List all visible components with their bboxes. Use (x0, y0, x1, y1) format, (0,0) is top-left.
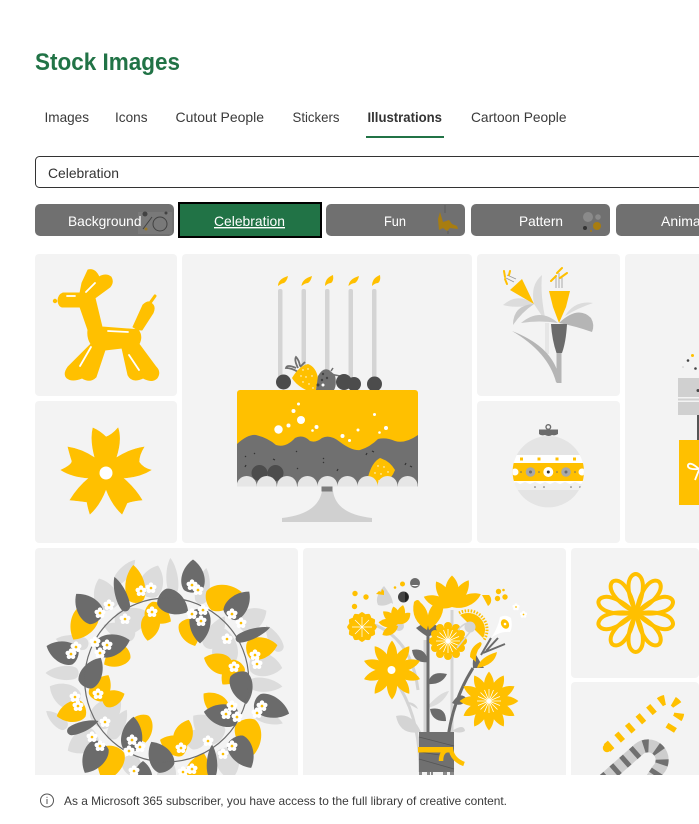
tab: Cutout People: Cutout People (176, 109, 264, 125)
small fan flower (378, 604, 413, 639)
icon: info (40, 794, 54, 807)
tile: flower outline (571, 548, 699, 678)
tile: bouquet (303, 548, 566, 788)
tile: yellow flower (35, 401, 177, 543)
lower fruit (245, 451, 412, 486)
fan flower (422, 576, 483, 612)
gray cane (604, 746, 662, 782)
cake body (237, 390, 418, 486)
large daisy B (362, 641, 422, 699)
tile: lilies (477, 254, 620, 396)
dark stems and leaves (412, 620, 505, 772)
tab: Cartoon People: Cartoon People (471, 109, 567, 125)
chip: Background: Background (68, 213, 142, 229)
active tab underline (366, 136, 444, 138)
candle flames (278, 275, 380, 286)
cake stand (282, 491, 372, 522)
bouquet wrap (418, 732, 464, 775)
chip: Fun: Fun (384, 213, 406, 229)
chip: Pattern: Pattern (519, 213, 563, 229)
wreath ring (85, 598, 249, 762)
tab bar (44, 109, 567, 138)
tile: candy canes (571, 682, 699, 788)
scallop trim (237, 476, 418, 486)
light stems and leaves (375, 587, 465, 772)
light leaves (42, 556, 286, 786)
search box: Celebration (48, 165, 119, 181)
chip: Background (35, 204, 174, 236)
half gear flower H (457, 611, 487, 648)
tab: Stickers: Stickers (292, 109, 340, 125)
fruit on top (276, 357, 382, 392)
chip: Animals (616, 204, 699, 236)
scalloped flower D (429, 622, 467, 660)
tile: birthday cake (182, 254, 472, 543)
tile: gift boxes (625, 254, 699, 543)
seed pods and dots (352, 578, 527, 618)
chip: Celebration (selected) (179, 203, 321, 237)
chip: Celebration (selected): Celebration (214, 213, 285, 229)
blossoms (66, 579, 268, 777)
footer (0, 775, 699, 824)
chip: Fun (326, 204, 465, 236)
white bell flower (491, 616, 512, 638)
large daisy C (460, 672, 518, 730)
tile: ornament (477, 401, 620, 543)
chip: Pattern (471, 204, 610, 236)
daisy flower A (346, 611, 378, 643)
tab: Illustrations (active): Illustrations (368, 109, 442, 125)
tab: Icons: Icons (115, 109, 148, 125)
title: Stock Images (35, 49, 180, 76)
yellow cane (603, 700, 679, 752)
footer note: As a Microsoft 365 subscriber, you have access to the full library of creative content. (64, 794, 507, 808)
tab: Images: Images (44, 109, 89, 125)
sprinkles (274, 402, 388, 442)
tile: balloon dog (35, 254, 177, 396)
candles (278, 289, 376, 385)
dark leaves (43, 560, 293, 788)
category chips (35, 203, 699, 237)
search box (36, 156, 699, 188)
tulips (413, 599, 497, 668)
yellow leaves (54, 564, 279, 789)
tile: wreath (35, 548, 298, 789)
cake icing wave (237, 435, 418, 487)
